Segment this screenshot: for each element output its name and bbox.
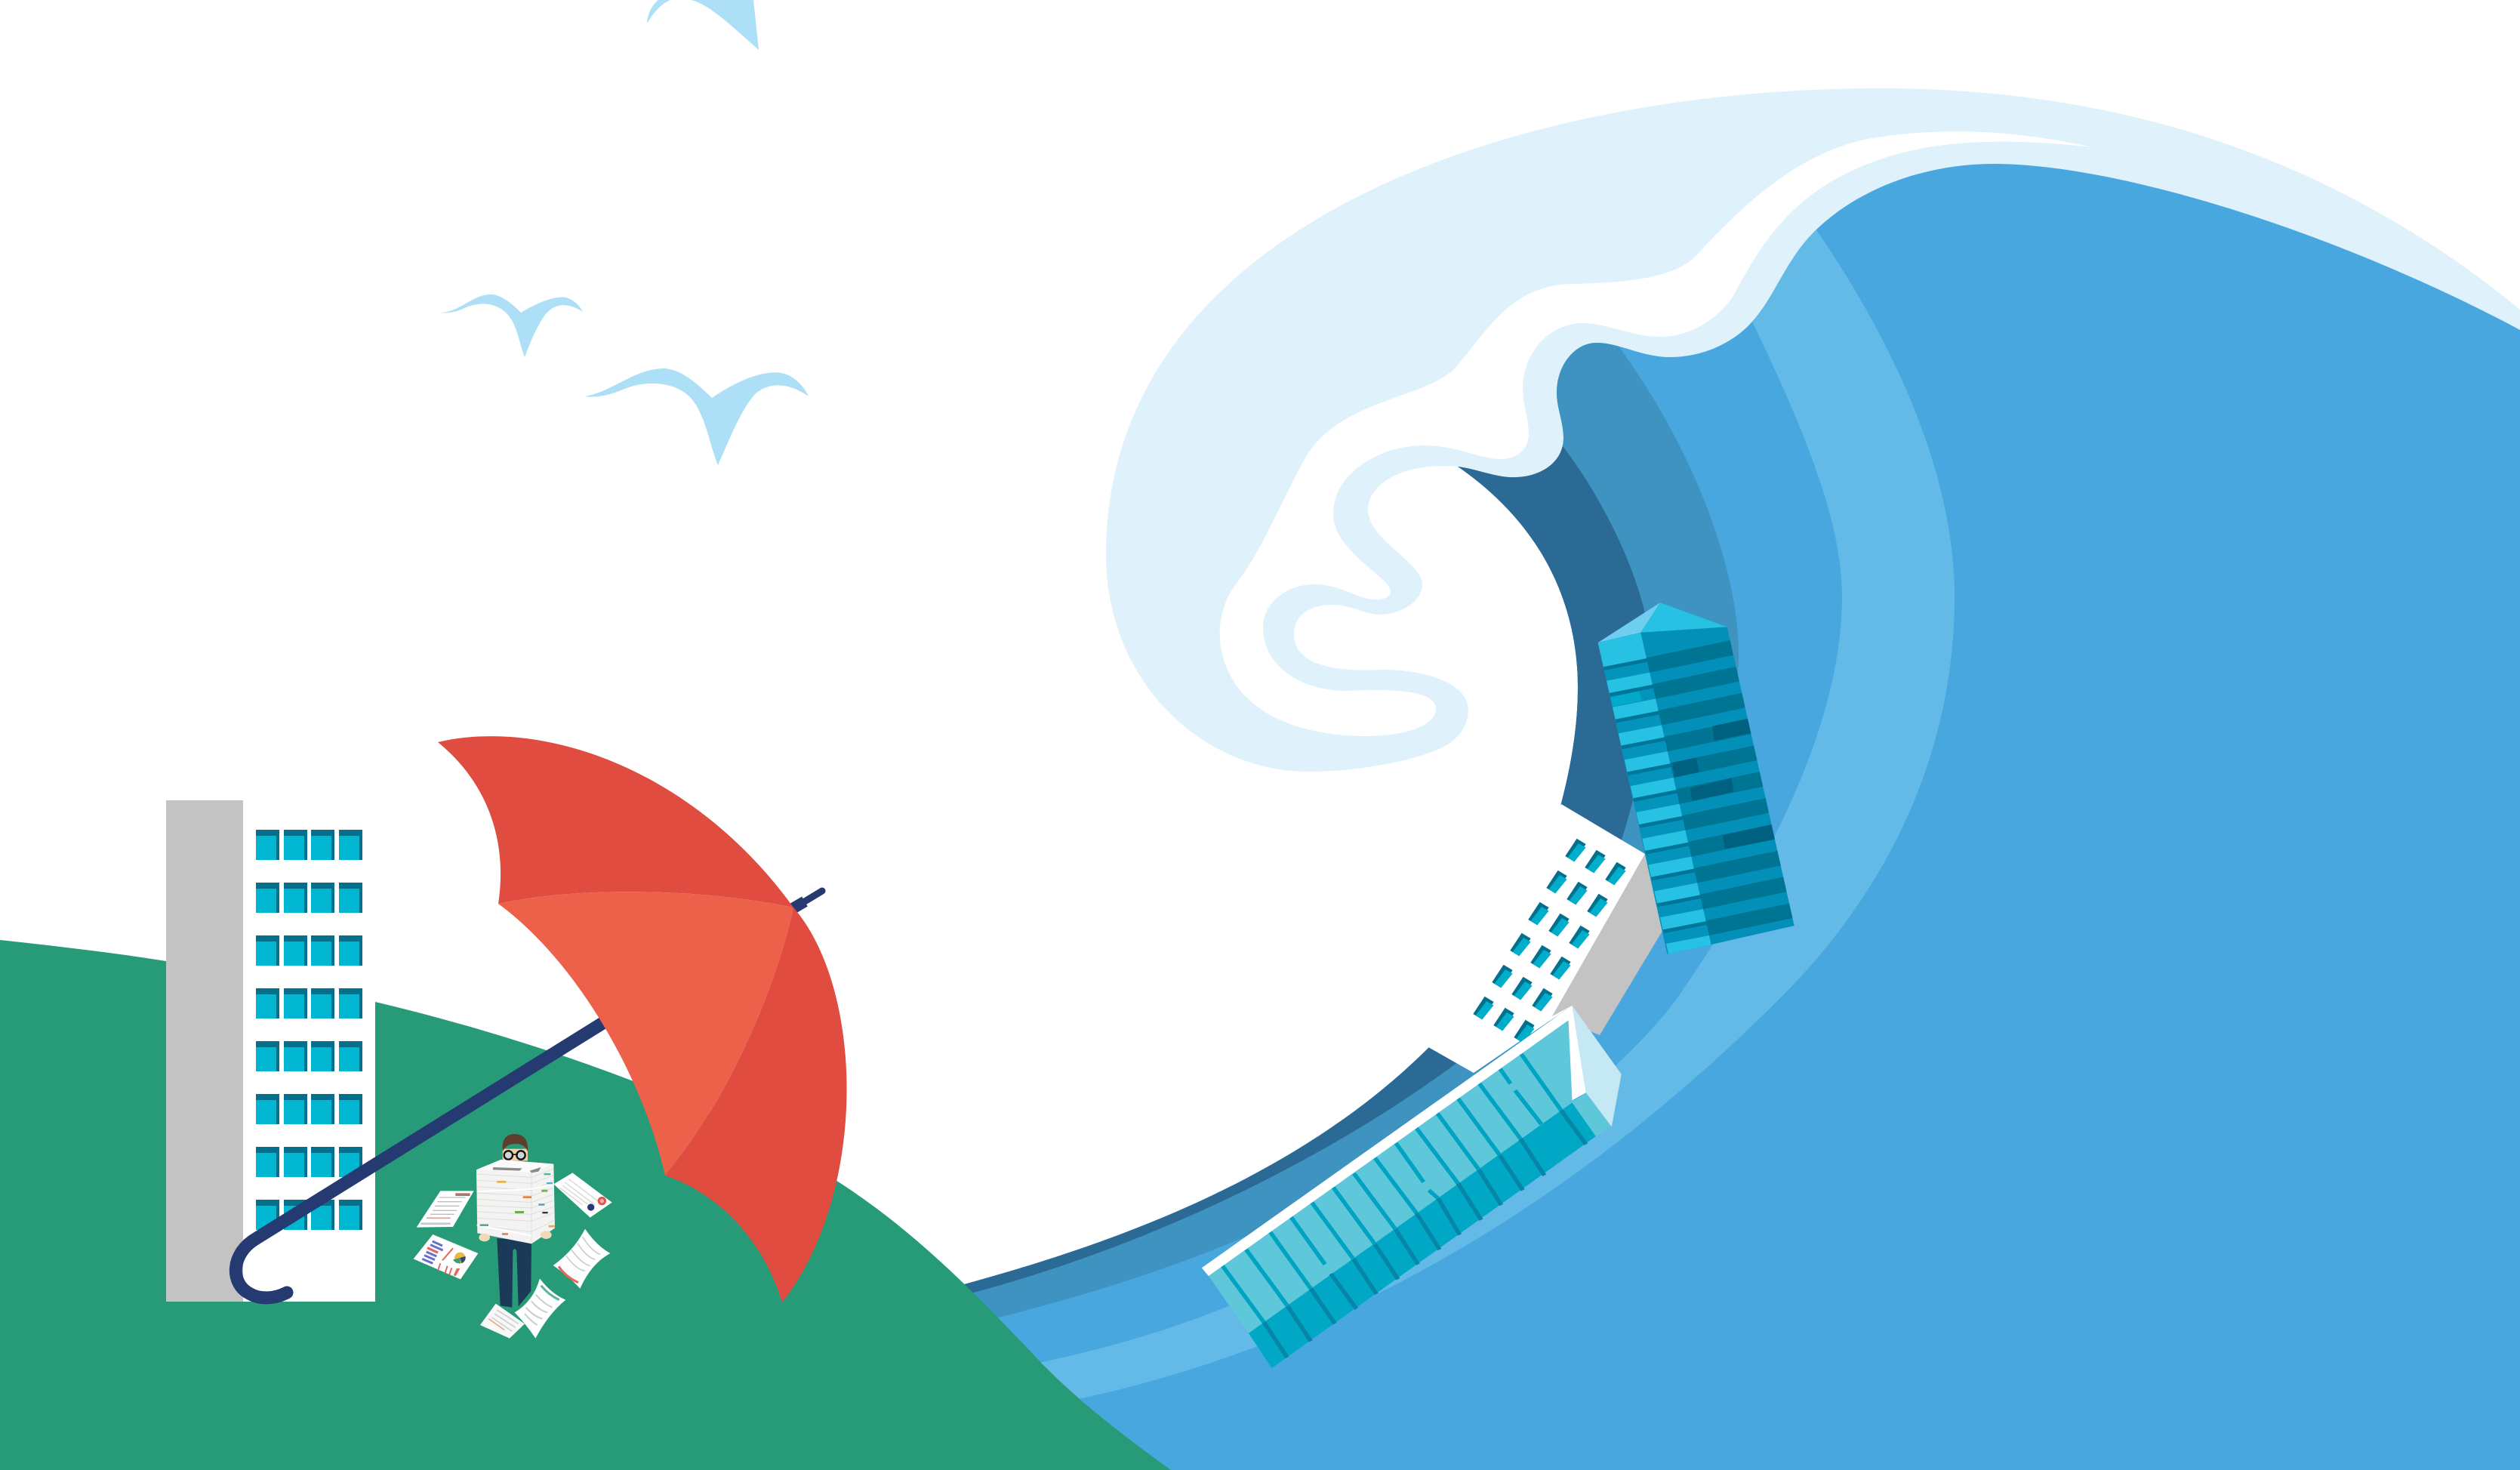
canopy panel: top bbox=[438, 736, 793, 908]
paper: text, bottom left bbox=[480, 1304, 525, 1339]
bird: large bbox=[584, 368, 809, 465]
building: upright office on the hill bbox=[166, 800, 375, 1302]
building: tilted blue glass tower bbox=[1597, 602, 1794, 954]
office side: grey bbox=[166, 800, 243, 1302]
paper: with badges, right bbox=[553, 1173, 612, 1218]
man carrying a stack of papers bbox=[414, 1134, 612, 1339]
man: hands bbox=[479, 1231, 552, 1241]
building windows bbox=[1473, 839, 1626, 1043]
wave foam: pale outer crest bbox=[1106, 88, 2520, 772]
wave foam: white curling streak bbox=[1220, 131, 2093, 736]
office front: white bbox=[243, 800, 375, 1302]
paper: chart, left bbox=[414, 1234, 478, 1279]
man: legs bbox=[497, 1238, 531, 1308]
umbrella handle bbox=[236, 891, 822, 1298]
canopy panel: middle bbox=[498, 892, 793, 1176]
wave body with colour bands bbox=[964, 164, 2520, 1470]
man: head with glasses bbox=[503, 1134, 528, 1160]
green hill bbox=[0, 940, 1171, 1470]
wave band: dark inner lip bbox=[964, 447, 1649, 1293]
paper: invoice, left bbox=[417, 1191, 474, 1228]
building: toppled long teal block bbox=[1202, 1006, 1622, 1368]
bird: small bbox=[439, 294, 583, 357]
wave band: light blue bbox=[981, 227, 1955, 1419]
office windows bbox=[256, 830, 362, 1230]
building front: white bbox=[1428, 804, 1645, 1073]
canopy panel: right bbox=[665, 908, 847, 1302]
bird: top, cropped by the edge bbox=[647, 0, 759, 50]
paper: text with green bar, bottom right bbox=[515, 1278, 565, 1339]
stack: coloured tabs bbox=[480, 1173, 555, 1235]
red umbrella canopy bbox=[438, 736, 847, 1302]
building side: grey bbox=[1552, 854, 1672, 1035]
paper: text with red bar, right bbox=[553, 1229, 610, 1289]
wave band: mid blue bbox=[964, 343, 1739, 1317]
building: tilted white block with grey side bbox=[1428, 804, 1672, 1073]
man: paper stack bbox=[476, 1160, 555, 1243]
